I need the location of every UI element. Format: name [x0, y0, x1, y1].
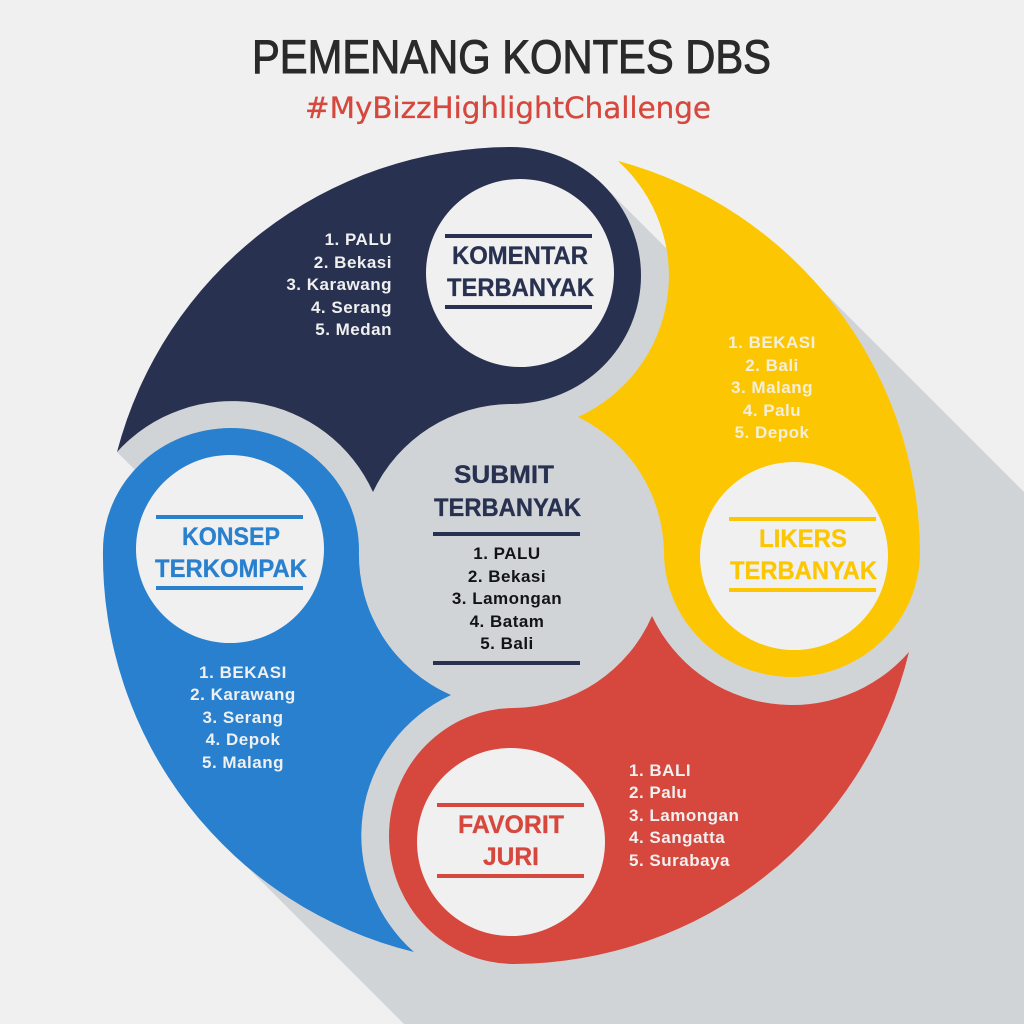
ranking list	[629, 761, 739, 870]
ranking list: 1. BALI	[629, 761, 691, 780]
badge heading: JURI	[483, 843, 539, 871]
center heading: TERBANYAK	[434, 494, 581, 522]
ranking list: 3. Serang	[202, 708, 284, 727]
badge heading: TERBANYAK	[447, 274, 594, 302]
blue swirl shape	[103, 428, 451, 952]
ranking list: 2. Palu	[629, 783, 687, 802]
ranking list	[452, 544, 562, 653]
center heading	[433, 461, 581, 536]
badge heading: KOMENTAR	[452, 242, 588, 270]
panel: likers terbanyak	[578, 161, 920, 677]
ranking list	[190, 663, 296, 772]
center heading: SUBMIT	[454, 461, 554, 489]
panel: komentar terbanyak	[117, 147, 641, 492]
long diagonal shadow	[117, 184, 1024, 1024]
panel: favorit juri	[389, 616, 909, 964]
ranking list: 1. PALU	[473, 544, 541, 563]
ranking list: 3. Lamongan	[629, 806, 739, 825]
ranking list: 1. BEKASI	[199, 663, 287, 682]
ranking list: 2. Bekasi	[468, 567, 546, 586]
badge heading	[729, 517, 877, 592]
ranking list: 5. Surabaya	[629, 851, 730, 870]
ranking list: 5. Bali	[480, 634, 534, 653]
panel: submit terbanyak	[433, 461, 581, 665]
badge heading	[437, 803, 584, 878]
badge heading: TERBANYAK	[730, 557, 877, 585]
badge heading: TERKOMPAK	[155, 555, 307, 583]
ranking list: 2. Bekasi	[314, 253, 392, 272]
ranking list: 4. Serang	[311, 298, 392, 317]
badge circle	[417, 748, 605, 936]
badge heading	[155, 515, 307, 590]
title: PEMENANG KONTES DBS	[252, 30, 771, 83]
bottom rule	[433, 661, 580, 665]
ranking list	[728, 333, 816, 442]
badge circle	[136, 455, 324, 643]
badge heading: LIKERS	[759, 525, 847, 553]
ranking list: 4. Palu	[743, 401, 801, 420]
ranking list: 1. PALU	[325, 230, 392, 249]
ranking list: 5. Depok	[735, 423, 809, 442]
subtitle hashtag: #MyBizzHighlightChallenge	[305, 91, 711, 125]
ranking list: 4. Depok	[206, 730, 280, 749]
navy swirl shape	[117, 147, 641, 492]
ranking list: 1. BEKASI	[728, 333, 816, 352]
ranking list: 3. Lamongan	[452, 589, 562, 608]
ranking list: 4. Sangatta	[629, 828, 725, 847]
badge heading	[445, 234, 594, 309]
badge heading: FAVORIT	[458, 811, 564, 839]
badge circle	[426, 179, 614, 367]
ranking list: 2. Bali	[745, 356, 799, 375]
ranking list: 3. Malang	[731, 378, 813, 397]
panel: konsep terkompak	[103, 428, 451, 952]
ranking list: 5. Medan	[315, 320, 392, 339]
ranking list: 2. Karawang	[190, 685, 296, 704]
badge circle	[700, 462, 888, 650]
ranking list: 5. Malang	[202, 753, 284, 772]
red swirl shape	[389, 616, 909, 964]
badge heading: KONSEP	[182, 523, 280, 551]
ranking list	[286, 230, 392, 339]
ranking list: 3. Karawang	[286, 275, 392, 294]
yellow swirl shape	[578, 161, 920, 677]
ranking list: 4. Batam	[470, 612, 544, 631]
